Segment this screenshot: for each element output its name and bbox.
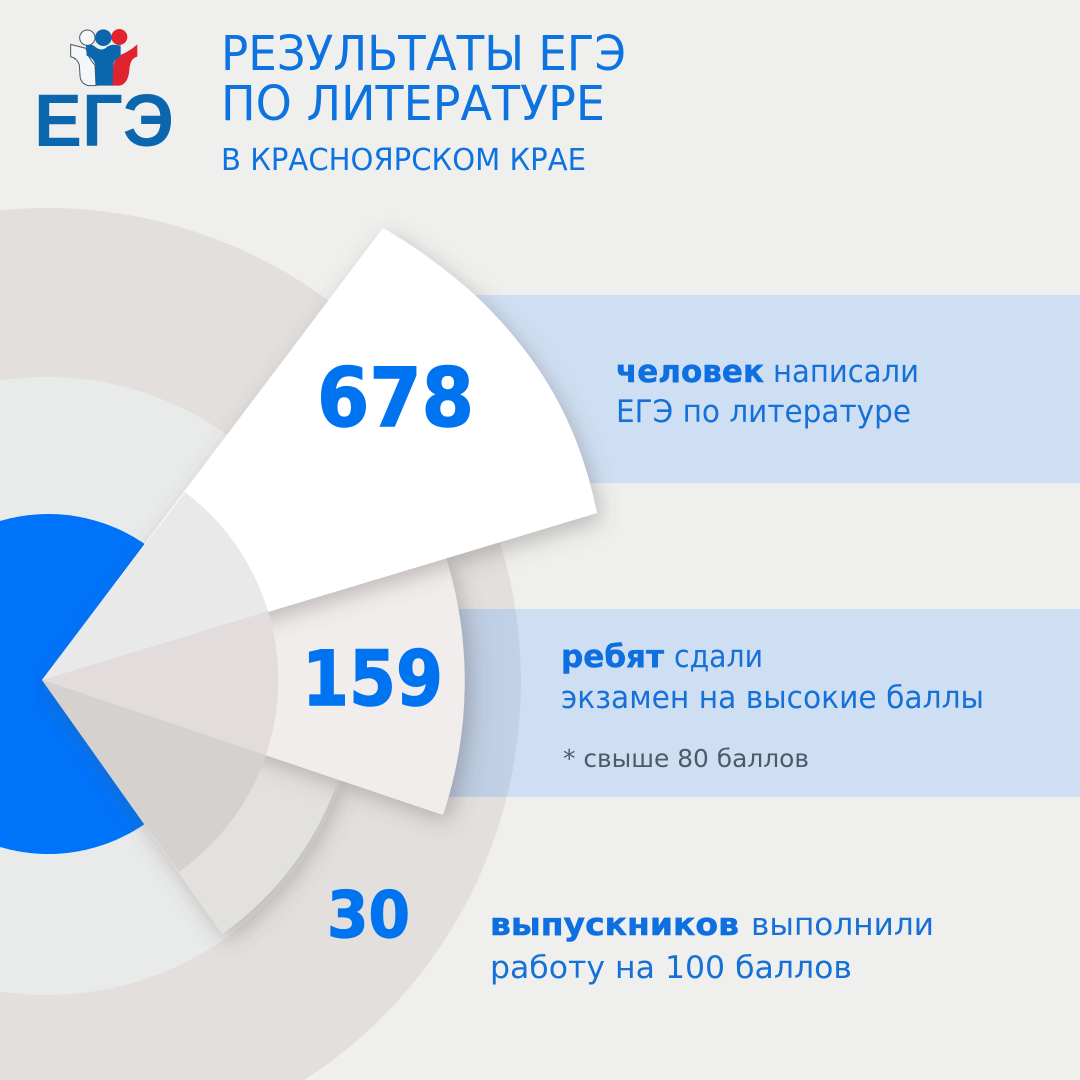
- text block: 159 caption: ребят: [561, 639, 664, 675]
- logo: EGE emblem: [34, 29, 174, 162]
- icon: three figures: [71, 29, 137, 86]
- title: РЕЗУЛЬТАТЫ ЕГЭ: [221, 26, 626, 82]
- inner wedge: top: [42, 492, 268, 680]
- inner wedge: middle: [42, 611, 278, 755]
- sector: 678 people: [42, 228, 597, 680]
- blue centre disc: [0, 514, 218, 854]
- large background ring: [0, 208, 521, 1080]
- text block: 30 caption: выполнили: [751, 907, 934, 943]
- text block: 159 caption: сдали: [674, 639, 763, 675]
- inner wedge: bottom: [42, 680, 266, 872]
- number: 678: 678: [317, 352, 474, 446]
- text block: 159 caption: экзамен на высокие баллы: [561, 680, 984, 716]
- sector: 30 graduates: [42, 680, 338, 934]
- title: В КРАСНОЯРСКОМ КРАЕ: [221, 143, 586, 178]
- text block: 159 caption: [561, 639, 984, 773]
- ring inner disc: [0, 377, 356, 995]
- band: 678 row: [400, 295, 1080, 483]
- number: 30: 30: [327, 879, 410, 953]
- text block: 159 caption: * свыше 80 баллов: [563, 744, 809, 773]
- number: 159: 159: [302, 634, 443, 723]
- text block: 30 caption: работу на 100 баллов: [490, 950, 852, 986]
- text block: 678 caption: написали: [773, 354, 919, 390]
- text block: 678 caption: ЕГЭ по литературе: [616, 394, 911, 430]
- ring over band overlap: [448, 609, 521, 797]
- logo wordmark: ЕГЭ: [34, 79, 174, 162]
- title: ПО ЛИТЕРАТУРЕ: [221, 76, 605, 132]
- text block: 30 caption: [490, 907, 934, 986]
- band: 159 row: [400, 609, 1080, 797]
- text block: 30 caption: выпускников: [490, 907, 739, 943]
- sector: 159 students: [42, 557, 465, 815]
- text block: 678 caption: [616, 354, 919, 430]
- title: [221, 26, 626, 178]
- text block: 678 caption: человек: [616, 354, 764, 390]
